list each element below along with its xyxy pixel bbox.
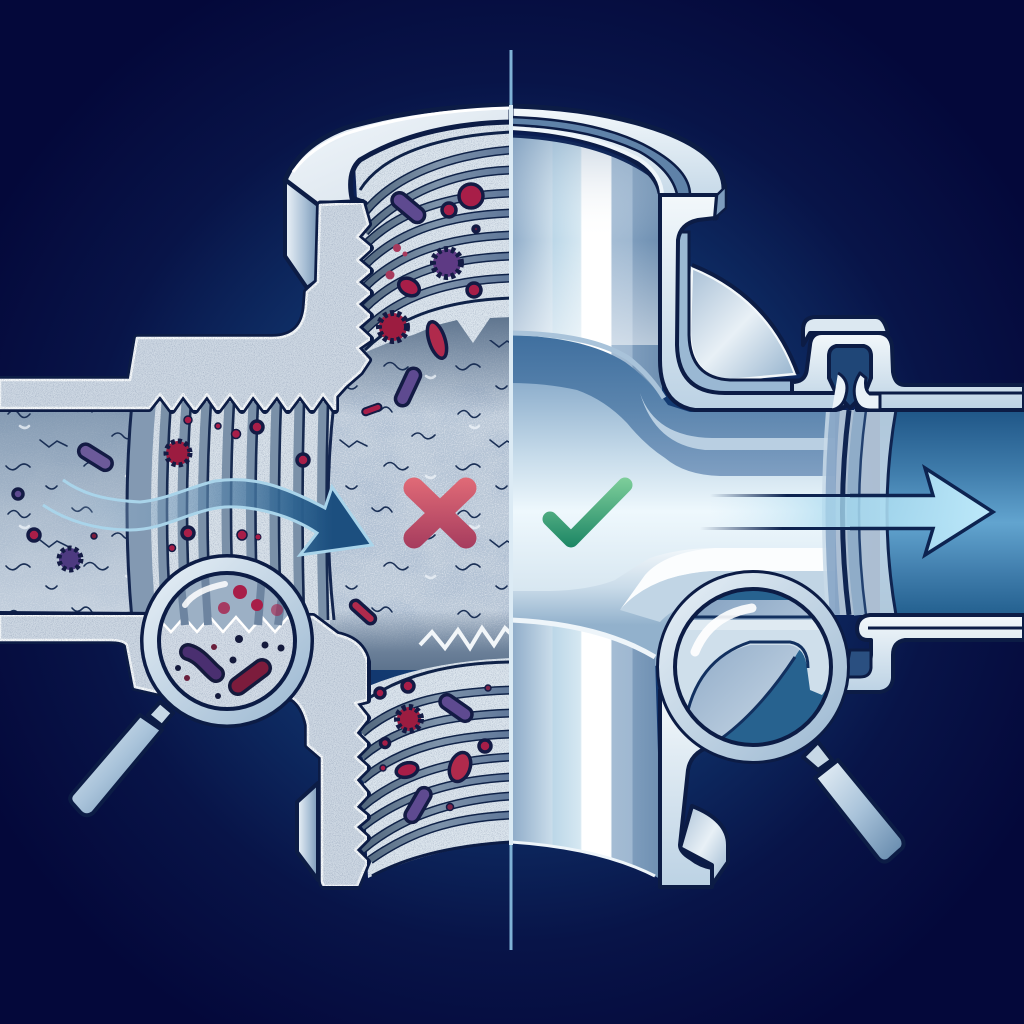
rough deposit interior (0, 315, 511, 670)
upper socket interior (511, 136, 662, 400)
arrow: restricted flow (43, 480, 372, 555)
corroded metal wall lower (0, 615, 367, 886)
magnifier left: corrosion detail (70, 556, 312, 815)
lens ring (142, 556, 312, 726)
upper threaded socket (355, 122, 511, 352)
upper wall (660, 195, 850, 410)
hex shoulder lower (297, 783, 318, 880)
lens ring (658, 572, 848, 762)
lower socket interior (511, 620, 662, 880)
panel: corroded left side (0, 105, 511, 886)
lens contents (163, 575, 290, 707)
magnifier handle (70, 702, 173, 815)
corrosion jagged edge (420, 628, 511, 648)
bacteria and contaminants (13, 184, 491, 825)
lens contents (677, 591, 829, 743)
magnifier handle (803, 742, 904, 862)
check mark (550, 485, 625, 540)
flange side bevel (715, 186, 726, 218)
divider line (509, 50, 513, 950)
lower wall and fitting (660, 615, 1024, 887)
x mark (414, 488, 466, 538)
corroded metal wall upper (0, 203, 370, 410)
central chamber (511, 333, 835, 668)
outlet pipe with ring (822, 410, 1024, 615)
hex shoulder upper (285, 180, 318, 288)
vertical threads in main run (127, 402, 334, 620)
panel: clean right side (511, 106, 1024, 887)
expansion loop (792, 317, 1024, 410)
channel behind upper wall (677, 232, 805, 395)
magnifier right: clean detail (658, 572, 904, 862)
arrow: clean flow (700, 468, 993, 555)
lower threaded socket (360, 658, 511, 878)
top rim (285, 105, 511, 205)
dome behind wall (690, 265, 798, 380)
top flange rim (511, 106, 724, 218)
